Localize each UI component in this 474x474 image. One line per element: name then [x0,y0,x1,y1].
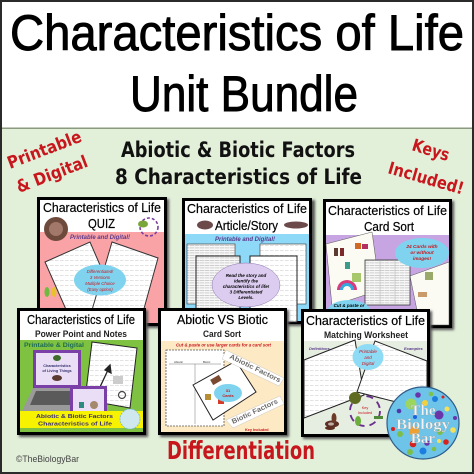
subtitle: Abiotic & Biotic Factors [121,138,355,162]
panel: card sort card [323,199,454,330]
instruction: Cut & paste or use larger cards for a card sort [176,342,271,348]
sorting worksheet [166,350,224,426]
panel: abiotic vs biotic card: Card Sort [203,329,241,339]
abiotic heading: Abiotic VS Biotic [177,313,268,327]
callout bubble [212,263,280,307]
callout bubble: and [364,355,372,360]
icon: rabbit right [284,222,308,228]
article pages [187,244,306,322]
green background panel [2,128,472,472]
subtitle: 8 Characteristics of Life [115,165,362,189]
callout: printable and digital: & Digital [14,152,91,198]
subtitle [115,138,362,189]
worksheets [45,242,158,323]
arrow [92,365,111,404]
icon: cell [44,217,68,241]
logo: The Biology Bar: Biology [396,417,451,433]
callout bubble: Read the story and [226,273,267,278]
worksheets [304,340,427,418]
callout bubble [352,344,384,370]
title line 2: Unit Bundle [130,66,358,122]
life cycle [349,392,383,426]
icon: figures [44,287,56,297]
sorting worksheet: Biotic [203,360,211,364]
panel: matching worksheet card: Examples [404,346,423,351]
printable label: Printable & Digital [24,343,84,349]
slide [33,350,81,388]
tilted cards sheet [193,361,256,420]
callout bubble: 3 Versions [90,275,111,280]
panel: power point card: Power Point and Notes [35,329,127,339]
icon: rabbit left [197,220,213,230]
power point heading: Characteristics of Life [27,313,135,327]
callout: printable and digital: Printable [5,127,85,174]
printable label: Printable and Digital! [70,235,130,241]
panel: quiz card: QUIZ [88,217,115,231]
tilted cards sheet: 31 [226,388,231,393]
copyright: ©TheBiologyBar [16,454,79,465]
callout bubble: (Easy option) [87,287,113,292]
logo: The Biology Bar [387,387,459,459]
yellow banner [20,411,143,428]
callout bubble: Differentiated! [87,269,114,274]
key included note: Key Included [245,428,269,432]
laptop [22,388,84,411]
yellow banner: Characteristics of Life [38,422,112,428]
panel: card sort card: Card Sort [364,220,414,234]
article card heading: Characteristics of Life [187,202,307,216]
panel: article card: Article/Story [215,219,279,233]
life cycle: Included [358,411,372,415]
tilted cards sheet: Cards [222,393,234,398]
panel: quiz card [37,197,169,328]
title panel [2,2,472,129]
quiz card heading: Characteristics of Life [43,201,161,215]
printable label: Printable and Digital! [215,237,275,243]
callout bubble: cards: 24 Cards with [405,244,438,250]
life cycle: Key [362,406,368,410]
callout: keys included: Keys [410,136,452,166]
column labels: Definitions [309,346,330,351]
icon: leaf cycle [138,218,158,236]
small slide [70,386,107,412]
sorting worksheet: Abiotic [174,360,184,364]
callout bubble: characteristics of life! [223,284,270,289]
callout bubble: 3 Differentiated [230,290,263,294]
callout bubble: cards: images! [413,256,431,262]
slide: of Living Things [42,369,72,373]
callout bubble: cards [395,238,449,268]
differentiation label: Differentiation [167,436,315,465]
callout bubble: cards: or without [410,250,434,256]
callout: keys included [386,136,466,199]
panel: article card [182,198,315,326]
panel: power point card [17,308,148,437]
label: biotic factors: Biotic Factors [231,398,279,426]
panel: matching worksheet card: Matching Worksheet [324,330,408,340]
matching heading: Characteristics of Life [306,314,425,328]
notes page [85,342,137,408]
callout: printable and digital [5,127,91,198]
callout bubble: Multiple Choice [85,281,115,286]
logo text: The [410,403,436,419]
logo: The Biology Bar: Bar [411,431,435,447]
sort cards [326,232,449,325]
icon: animals [325,413,339,430]
logo mini [120,409,140,429]
callout bubble: Levels. [238,295,254,300]
callout bubble [74,264,126,296]
callout bubble: Printable [359,349,377,354]
callout bubble: cut and paste: Cut & paste or [334,303,365,308]
panel: abiotic vs biotic card [158,308,289,437]
callout bubble: identify the [234,278,258,284]
panel: matching worksheet card [301,309,432,439]
card sort heading: Characteristics of Life [328,204,447,218]
slide: Characteristics [43,364,71,368]
callout bubble: Digital [362,361,375,366]
yellow banner: Abiotic & Biotic Factors [36,414,113,420]
label: abiotic factors: Abiotic Factors [228,354,282,384]
